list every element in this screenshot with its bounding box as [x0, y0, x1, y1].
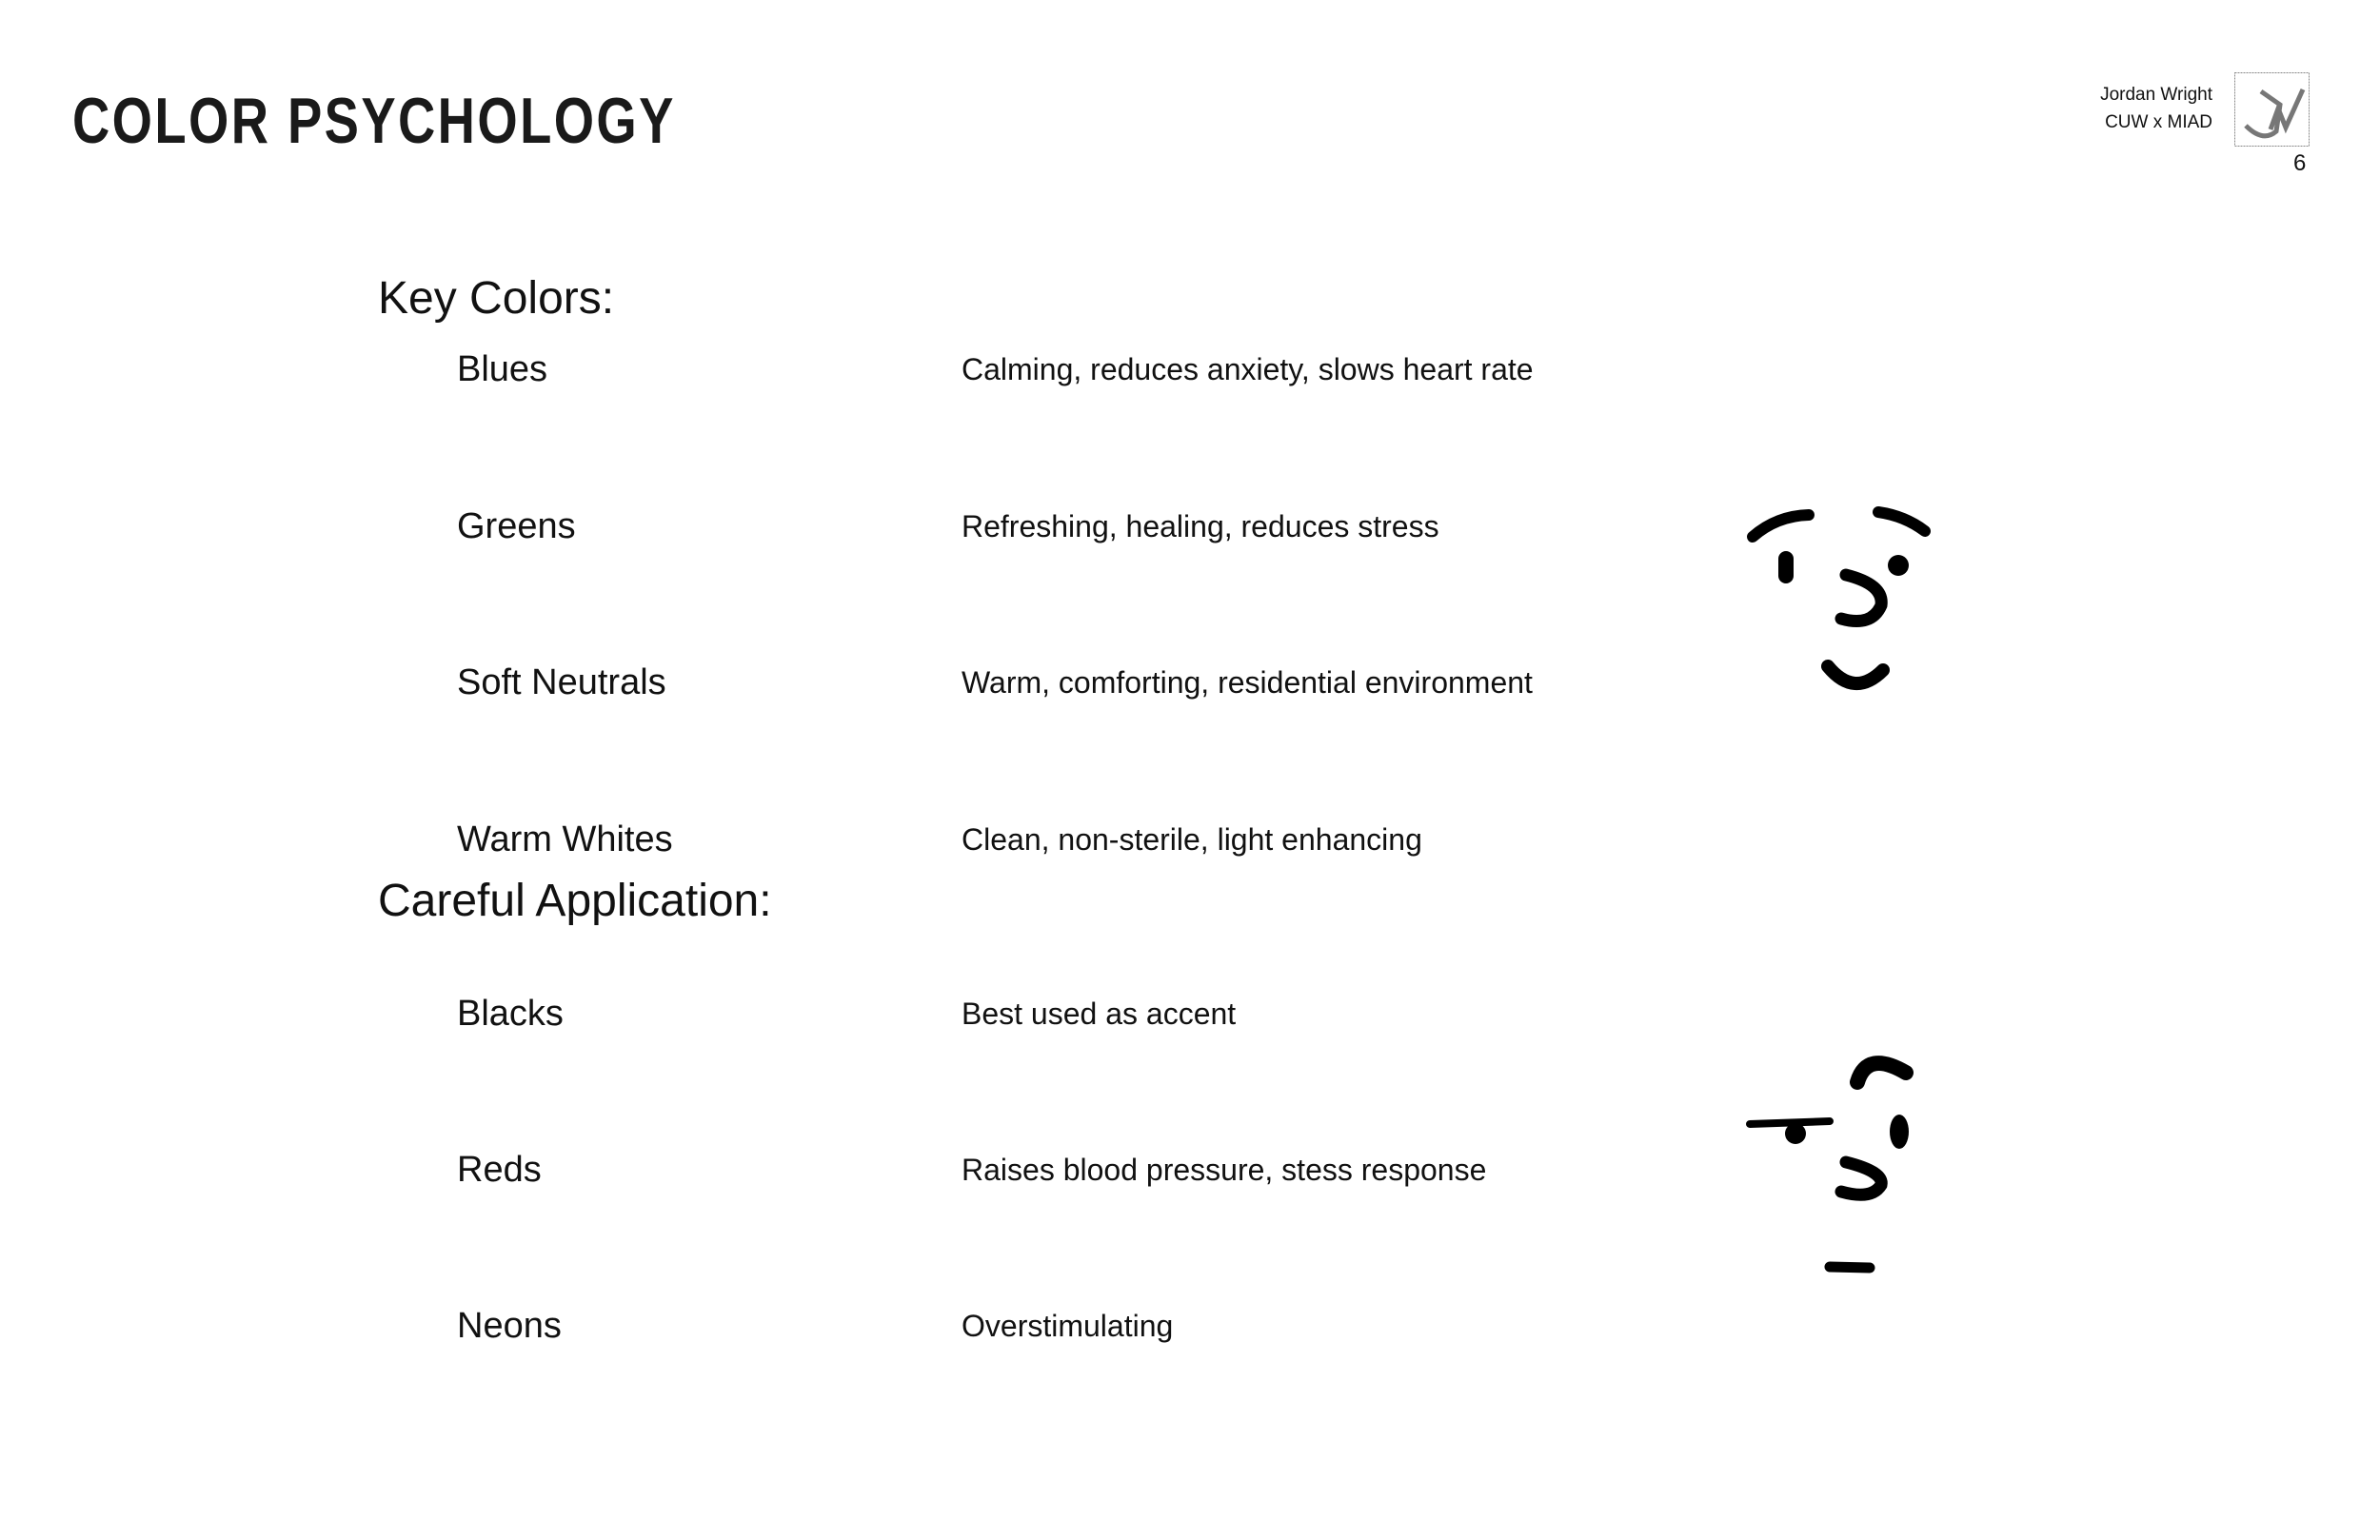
heading: key colors: Key Colors: — [378, 273, 614, 324]
row: blues: Blues — [457, 349, 547, 389]
desc: greens: Refreshing, healing, reduces stress — [962, 509, 1439, 543]
icon: skeptical face — [1746, 1056, 1914, 1273]
row: warm whites: Warm Whites — [457, 819, 673, 859]
row: blacks: Blacks — [457, 994, 564, 1034]
desc: blacks: Best used as accent — [962, 997, 1236, 1031]
desc: soft neutrals: Warm, comforting, residential environment — [962, 665, 1533, 700]
row: soft neutrals: Soft Neutrals — [457, 662, 666, 702]
logo — [2234, 72, 2310, 147]
row: neons: Neons — [457, 1306, 562, 1346]
desc: warm whites: Clean, non-sterile, light enhancing — [962, 822, 1422, 857]
page number: 6 — [2293, 150, 2306, 176]
author block: CUW x MIAD — [2105, 112, 2212, 132]
heading: careful application: Careful Application: — [378, 876, 772, 926]
row: greens: Greens — [457, 506, 576, 546]
desc: neons: Overstimulating — [962, 1309, 1173, 1343]
author block: Jordan Wright — [2100, 85, 2212, 105]
title: COLOR PSYCHOLOGY — [72, 85, 676, 157]
row: reds: Reds — [457, 1150, 542, 1190]
author block — [2100, 85, 2212, 132]
icon: happy face — [1747, 506, 1931, 691]
desc: reds: Raises blood pressure, stess response — [962, 1153, 1486, 1187]
desc: blues: Calming, reduces anxiety, slows heart rate — [962, 352, 1534, 386]
